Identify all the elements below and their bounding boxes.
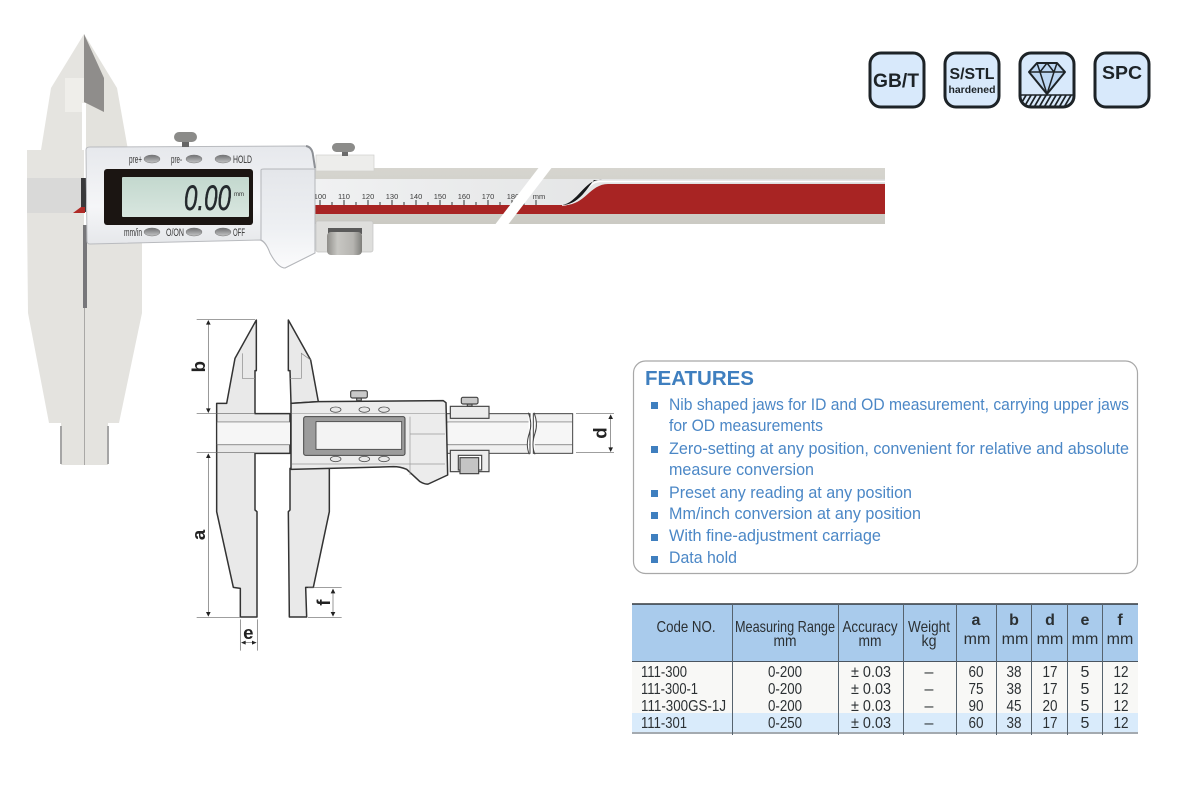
badge: diamond hardness: [1020, 53, 1074, 107]
table rows: 38: [1006, 715, 1022, 732]
button labels: pre+: [129, 154, 142, 166]
table header: mm: [1107, 631, 1133, 648]
table header: mm: [774, 633, 796, 650]
LCD display: [104, 169, 253, 225]
feature list: Nib shaped jaws for ID and OD measurement, carrying upper jaws: [669, 395, 1129, 414]
buttons: [144, 155, 231, 236]
table rows: 5: [1081, 681, 1090, 698]
button labels: O/ON: [166, 227, 184, 239]
dimension labels: d: [590, 427, 611, 439]
lower jaw pair: [27, 213, 142, 465]
specification table: [632, 604, 1138, 735]
table rows: 12: [1114, 715, 1129, 732]
thumb screw: [182, 140, 189, 147]
table rows: 60: [968, 664, 984, 681]
feature list: [669, 395, 1129, 567]
table header: Code NO.: [656, 619, 716, 636]
body drawing: [291, 401, 448, 484]
photo: digital caliper: 0.00: [184, 179, 231, 218]
badge: GB/T: [870, 53, 924, 107]
table rows: 17: [1042, 681, 1058, 698]
table rows: –: [925, 681, 934, 698]
dimension diagram: [188, 319, 614, 651]
fixed upper jaw: [27, 34, 84, 180]
table rows: 17: [1042, 664, 1058, 681]
dimension labels: e: [243, 622, 254, 643]
table header: [656, 612, 1133, 650]
table rows: –: [925, 664, 934, 681]
ruler marks: [314, 192, 545, 205]
ruler marks: 120: [362, 192, 374, 201]
clamp drawing: [351, 391, 489, 474]
ruler marks: 160: [458, 192, 470, 201]
table header: mm: [964, 631, 990, 648]
table rows: 90: [968, 698, 984, 715]
feature list: Mm/inch conversion at any position: [669, 504, 921, 523]
table rows: 111-300: [641, 664, 687, 681]
table rows: ± 0.03: [851, 664, 891, 681]
table rows: 0-200: [768, 681, 802, 698]
button ovals drawing: [330, 407, 389, 462]
button labels: HOLD: [233, 154, 252, 166]
jaw nib shading: [84, 34, 104, 112]
badge: S/STL hardened: S/STL: [950, 66, 995, 83]
table rows: 12: [1114, 681, 1129, 698]
badge: SPC: [1095, 53, 1149, 107]
table header: Weight: [908, 619, 950, 636]
table header: b: [1009, 612, 1019, 629]
badge: GB/T: GB/T: [873, 71, 919, 92]
table rows: 38: [1006, 681, 1022, 698]
lower clamp block and roller: [316, 221, 373, 252]
ruler marks: mm: [533, 192, 545, 201]
ruler marks: 170: [482, 192, 494, 201]
panel: features: [634, 361, 1138, 574]
feature list: for OD measurements: [669, 416, 823, 435]
table rows: 5: [1081, 715, 1090, 732]
button labels: mm/in: [124, 227, 142, 239]
table header: f: [1117, 612, 1123, 629]
feature bullets: [651, 402, 658, 563]
table header: kg: [922, 633, 936, 650]
table header: mm: [858, 633, 882, 650]
table rows: 111-301: [641, 715, 687, 732]
display drawing: [304, 417, 405, 455]
table backgrounds: [632, 604, 1138, 661]
table rows: 0-250: [768, 715, 802, 732]
table header: e: [1081, 612, 1090, 629]
dimension labels: b: [188, 361, 209, 372]
feature list: Data hold: [669, 548, 737, 567]
photo: digital caliper: [27, 34, 885, 465]
ruler marks: 110: [338, 192, 350, 201]
table header: d: [1045, 612, 1055, 629]
beam: [315, 168, 885, 224]
table rows: 111-300GS-1J: [641, 698, 726, 715]
slider body: [86, 146, 315, 268]
jaw drawing: fixed: [217, 320, 290, 617]
table rows: 17: [1042, 715, 1058, 732]
feature list: Preset any reading at any position: [669, 483, 912, 502]
table header: Accuracy: [842, 619, 898, 636]
table rows: 38: [1006, 664, 1022, 681]
badge: S/STL hardened: hardened: [948, 84, 996, 96]
table rows: ± 0.03: [851, 715, 891, 732]
table rows: 12: [1114, 664, 1129, 681]
ruler marks: 140: [410, 192, 422, 201]
dimension lines: [197, 319, 614, 651]
table header: mm: [1002, 631, 1028, 648]
table header: Measuring Range: [735, 619, 835, 636]
photo: digital caliper: mm: [234, 192, 244, 198]
ruler marks: 100: [314, 192, 326, 201]
badge: SPC: SPC: [1102, 62, 1142, 83]
ruler marks: 150: [434, 192, 446, 201]
break slash: [494, 166, 553, 226]
table rows: 111-300-1: [641, 681, 698, 698]
table rows: ± 0.03: [851, 681, 891, 698]
table rows: 5: [1081, 698, 1090, 715]
feature list: With fine-adjustment carriage: [669, 526, 881, 545]
dimension labels: a: [188, 529, 209, 540]
dimension arrowheads: [206, 320, 613, 645]
table rows: ± 0.03: [851, 698, 891, 715]
table header: mm: [1037, 631, 1063, 648]
features heading: FEATURES: [645, 367, 754, 390]
table header: a: [972, 612, 981, 629]
table rows: 45: [1006, 698, 1022, 715]
upper clamp block and screw: [316, 155, 374, 171]
table rows: –: [925, 698, 934, 715]
feature list: measure conversion: [669, 460, 814, 479]
button labels: [124, 154, 252, 239]
beam head: [27, 178, 82, 213]
table rows: 0-200: [768, 664, 802, 681]
table rows: –: [925, 715, 934, 732]
table header: mm: [1072, 631, 1098, 648]
table rows: [641, 664, 1129, 732]
feature list: Zero-setting at any position, convenient for relative and absolute: [669, 439, 1129, 458]
moving upper jaw: [84, 34, 128, 150]
badge: S/STL hardened: [945, 53, 999, 107]
beam drawing: [255, 414, 573, 453]
jaw drawing: moving: [288, 320, 318, 403]
table rows: 0-200: [768, 698, 802, 715]
red scale band: [315, 184, 885, 214]
button labels: OFF: [233, 227, 245, 239]
table rows: 60: [968, 715, 984, 732]
table rows: 5: [1081, 664, 1090, 681]
table rows: 75: [968, 681, 984, 698]
button labels: pre-: [171, 154, 182, 166]
dimension labels: f: [313, 599, 334, 606]
ruler marks: 180: [507, 192, 519, 201]
dimension labels: [188, 361, 611, 643]
table rows: 12: [1114, 698, 1129, 715]
table rows: 20: [1042, 698, 1058, 715]
ruler marks: 130: [386, 192, 398, 201]
